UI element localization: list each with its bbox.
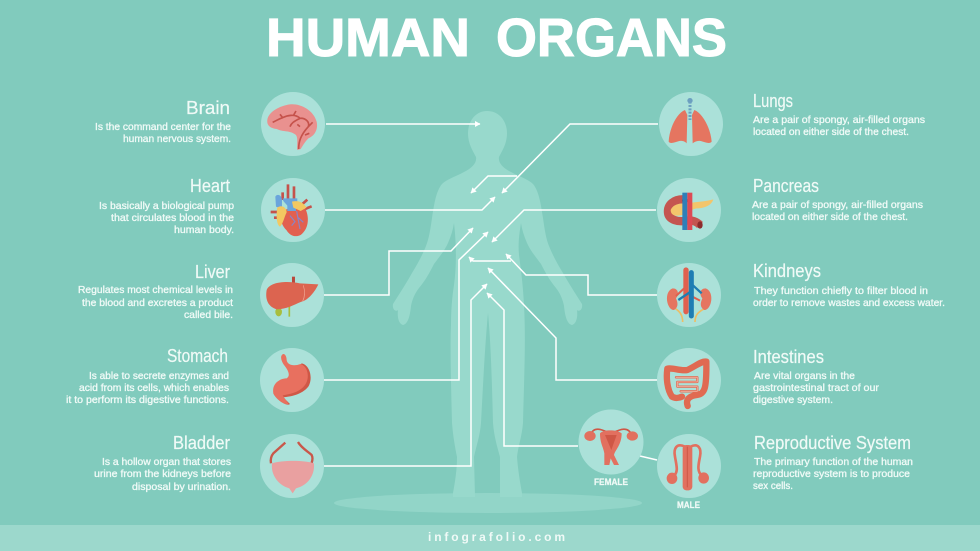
description: lungs: Are a pair of spongy, air-filled organs [753,114,925,126]
arrow: kidneys [506,254,657,295]
arrow: heart [325,197,495,210]
icon: male organs [657,434,721,498]
arrow: liver [324,228,473,295]
heading: intestines: Intestines [753,347,824,367]
description: intestines: digestive system. [753,394,833,406]
arrow: kidneys branch [469,257,511,261]
footer website: infografolio.com [428,530,565,544]
panel: pancreas [657,176,923,242]
description: heart [99,200,234,236]
description: bladder: urine from the kidneys before [94,468,231,480]
panel: heart [99,176,325,242]
description: heart: Is basically a biological pump [99,200,234,212]
panel: bladder [94,433,324,498]
label: female: FEMALE [594,477,628,488]
heading: heart: Heart [190,176,230,196]
title [266,8,727,68]
description: stomach: acid from its cells, which enables [79,382,229,394]
description: reproductive system: sex cells. [753,480,793,492]
description: brain: human nervous system. [123,133,231,145]
arrow: lungs branch [471,176,517,193]
heading: kidneys: Kindneys [753,261,821,281]
panel: lungs [659,91,925,156]
description: liver [78,284,233,321]
description: lungs [753,114,925,138]
panel: brain [95,92,325,156]
icon: heart [261,178,325,242]
description: reproductive system: reproductive system is to produce [753,468,910,480]
description: pancreas: located on either side of the chest. [752,211,908,223]
panel: kidneys [657,261,945,327]
description: pancreas [752,199,923,223]
description: intestines: Are vital organs in the [754,370,855,382]
description: brain [95,121,231,145]
icon: lungs [659,92,723,156]
description: pancreas: Are a pair of spongy, air-filled organs [752,199,923,211]
description: heart: that circulates blood in the [111,212,234,224]
icon: stomach [260,348,324,412]
description: brain: Is the command center for the [95,121,231,133]
arrow: bladder [324,284,487,466]
description: intestines [753,370,880,406]
icon: bladder [260,434,324,498]
arrow: brain [326,123,480,125]
arrow: intestines [488,268,657,380]
description: lungs: located on either side of the chest. [753,126,909,138]
arrow: pancreas [492,210,656,242]
arrow: reproductive [487,293,578,446]
icon: female organs [578,410,644,474]
description: intestines: gastrointestinal tract of our [753,382,880,394]
description: kidneys [753,285,945,309]
description: liver: the blood and excretes a product [82,297,233,309]
heading: brain: Brain [186,98,230,118]
heading: liver: Liver [195,262,230,282]
arrow: stomach [324,232,488,380]
panel: reproductive system [578,410,913,511]
connector lines [324,124,658,466]
heading: stomach: Stomach [167,346,228,366]
heading: pancreas: Pancreas [753,176,819,196]
description: bladder [94,456,231,493]
description: kidneys: They function chiefly to filter blood in [754,285,928,297]
connector: female to male [640,456,657,460]
heading: bladder: Bladder [173,433,230,453]
description: bladder: disposal by urination. [132,481,231,493]
label: male: MALE [677,500,700,511]
description: stomach: it to perform its digestive functions. [66,394,229,406]
description: bladder: Is a hollow organ that stores [102,456,231,468]
panel: intestines [657,347,880,412]
icon: brain [261,92,325,156]
icon: intestines [657,348,721,412]
icon: kidneys [657,263,721,327]
heading: lungs: Lungs [753,91,793,111]
human body silhouette [393,111,582,497]
ground shadow [334,493,642,513]
description: stomach [66,370,229,406]
description: reproductive system: The primary function of the human [754,456,913,468]
heading: reproductive system: Reproductive System [754,433,911,453]
description: stomach: Is able to secrete enzymes and [89,370,229,382]
footer bar [0,525,980,551]
arrow: lungs [502,124,658,193]
description: reproductive system [753,456,913,492]
description: liver: Regulates most chemical levels in [78,284,233,296]
description: heart: human body. [174,224,234,236]
description: kidneys: order to remove wastes and excess water. [753,297,945,309]
description: liver: called bile. [184,309,233,321]
icon: liver [260,263,324,327]
icon: pancreas [657,178,721,242]
title: HUMAN [266,8,470,68]
title: ORGANS [496,8,727,68]
panel: liver [78,262,324,327]
panel: stomach [66,346,324,412]
